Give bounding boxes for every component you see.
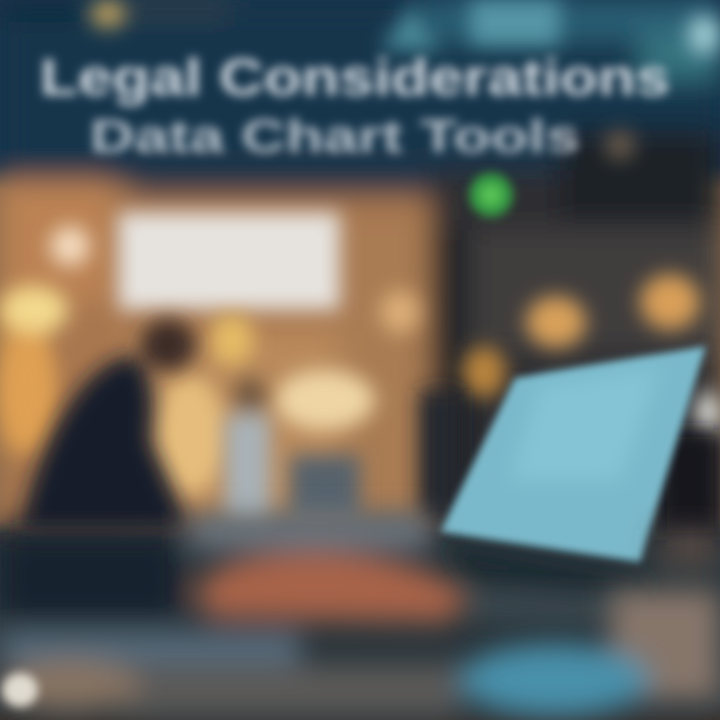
title: blurred headline text: [40, 49, 670, 162]
foreground light: white bokeh: [2, 673, 38, 707]
title: blurred headline text: Legal Considerations: [40, 49, 670, 107]
title: blurred headline text: Data Chart Tools: [90, 110, 580, 162]
laptop: teal screen and base: [440, 346, 720, 625]
background lights: warm bokeh: [0, 226, 720, 495]
foreground: hands and desk: [0, 515, 720, 716]
ceiling lights and teal roof shapes: [90, 0, 720, 160]
panel: white wall sign: [118, 212, 340, 310]
icon: green badge: [469, 173, 513, 217]
figure: seated person silhouette: [20, 319, 460, 530]
